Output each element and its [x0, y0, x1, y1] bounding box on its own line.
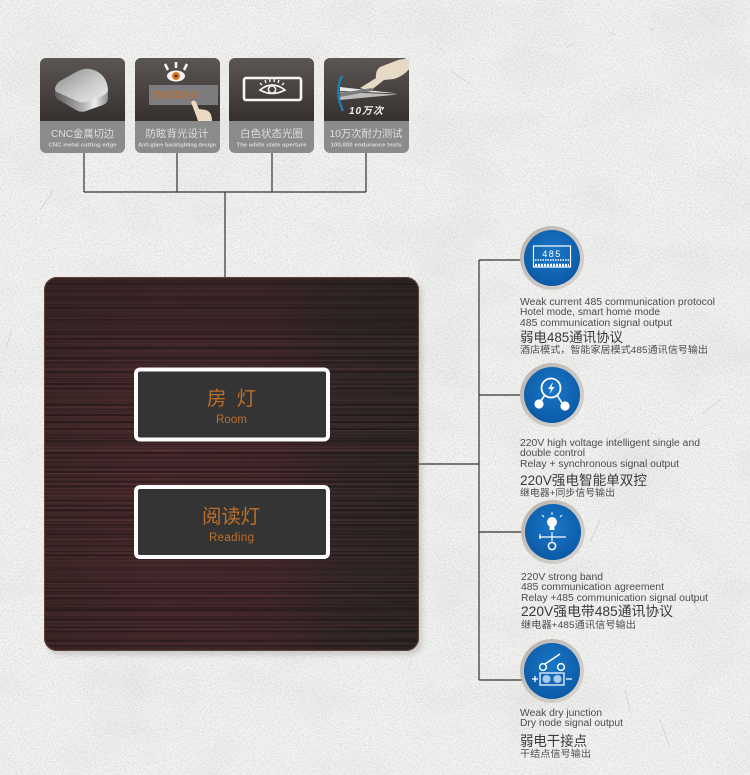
button sublabel: Reading	[209, 532, 254, 544]
heading: 220V强电带485通讯协议	[521, 604, 674, 619]
feature: 220V intelligent control	[520, 363, 700, 499]
description Chinese: 酒店模式，智能家居模式485通讯信号输出	[520, 344, 708, 356]
description English: Dry node signal output	[520, 718, 623, 729]
button sublabel: Room	[216, 414, 247, 426]
description Chinese: 继电器+同步信号输出	[520, 487, 615, 499]
description English	[520, 438, 700, 470]
button label: 阅读灯	[202, 506, 260, 528]
panel text: 防炫率设计	[153, 89, 199, 100]
description English	[520, 708, 623, 729]
description English: Weak dry junction	[520, 708, 602, 719]
connector lines: panel to right features	[419, 260, 522, 680]
card subtitle: Anti-glare backlighting design	[138, 142, 216, 148]
description English: Relay + synchronous signal output	[520, 459, 679, 470]
button: Room	[136, 370, 328, 440]
feature: 220V strong band 485	[521, 500, 708, 631]
heading: 弱电干接点	[520, 733, 587, 749]
icon: pointing hand	[191, 100, 212, 121]
card subtitle: CNC metal cutting edge	[48, 142, 116, 148]
icon: metal edge shape	[55, 69, 108, 112]
description Chinese: 继电器+485通讯信号输出	[521, 619, 636, 631]
icon label: 10万次	[349, 105, 385, 117]
icon: bulb and switch	[521, 500, 585, 564]
heading: 220V强电智能单双控	[520, 473, 648, 488]
feature card: white state aperture	[229, 58, 314, 153]
panel: brushed metal switch	[44, 277, 422, 655]
button label: 房 灯	[207, 388, 256, 410]
button: Reading	[136, 487, 328, 557]
icon: dry contact	[520, 639, 584, 703]
icon: 485 badge: 485	[542, 249, 562, 259]
feature card: 100,000 endurance tests	[324, 58, 410, 153]
description English: 485 communication agreement	[521, 582, 664, 593]
description English: 485 communication signal output	[520, 318, 672, 329]
icon: bolt network	[520, 363, 584, 427]
icon: eye with rays	[165, 62, 187, 82]
description English	[520, 297, 715, 329]
description Chinese: 干结点信号输出	[520, 748, 591, 760]
description English: Relay +485 communication signal output	[521, 593, 708, 604]
icon: hand pressing switch	[338, 58, 410, 111]
icon: glass panel	[149, 85, 218, 105]
description English: 220V strong band	[521, 572, 603, 583]
card title: 10万次耐力测试	[330, 127, 403, 140]
card subtitle: 100,000 endurance tests	[330, 142, 402, 148]
card subtitle: The white state aperture	[236, 142, 306, 148]
feature: weak dry junction	[520, 639, 623, 760]
icon: aperture with eye	[244, 78, 301, 100]
feature card: CNC metal cutting edge	[40, 58, 125, 153]
icon: 485 badge	[520, 226, 584, 290]
description English: Weak current 485 communication protocol	[520, 297, 715, 308]
card title: CNC金属切边	[51, 127, 114, 140]
connector lines: top feature cards to panel	[84, 153, 366, 277]
feature card: anti-glare backlighting	[135, 58, 220, 153]
description English: Hotel mode, smart home mode	[520, 307, 660, 318]
description English: double control	[520, 448, 585, 459]
card title: 白色状态光圈	[240, 127, 303, 140]
card title: 防眩背光设计	[146, 127, 209, 140]
heading: 弱电485通讯协议	[520, 330, 623, 345]
description English: 220V high voltage intelligent single and	[520, 438, 700, 449]
feature: weak current 485	[520, 226, 715, 356]
description English	[521, 572, 708, 604]
